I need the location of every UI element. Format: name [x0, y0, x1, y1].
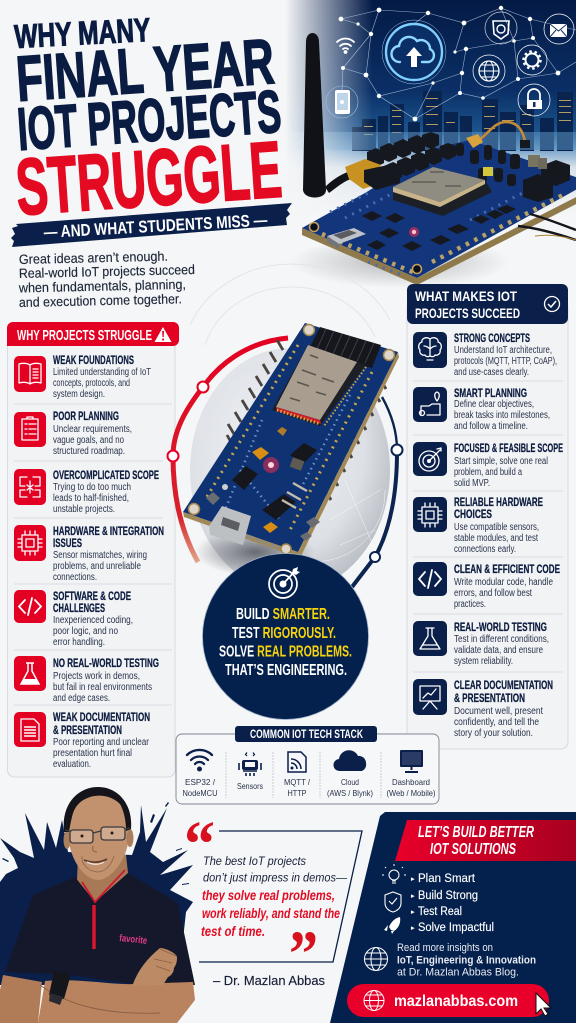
item: reliable hardware choices: CHOICES — [454, 508, 492, 521]
item: smart planning: Define clear objectives, — [454, 399, 534, 410]
item: no real-world testing: NO REAL-WORLD TESTING — [53, 657, 159, 670]
item: overcomplicated scope: unstable projects. — [53, 504, 115, 515]
item: weak foundations — [14, 354, 151, 400]
stack item: mqtt: HTTP — [288, 788, 307, 798]
item: reliable hardware choices: Use compatible sensors, — [454, 522, 539, 533]
item: overcomplicated scope — [14, 469, 159, 515]
item: weak documentation and presentation: Poor reporting and unclear — [53, 737, 150, 748]
quote block — [184, 808, 362, 991]
panel heading: what makes iot projects succeed — [407, 284, 568, 324]
chips — [232, 443, 317, 520]
item: poor planning — [14, 410, 132, 457]
gold pads — [277, 410, 320, 424]
intro paragraph: and execution come together. — [19, 291, 182, 310]
item: hardware and integration issues: problems, and unreliable — [53, 561, 141, 572]
quote block: The best IoT projects — [203, 854, 306, 868]
item: weak documentation and presentation: & PRESENTATION — [53, 724, 122, 737]
checklist: ▸ — [411, 876, 415, 883]
icon: mail — [544, 14, 574, 44]
intro paragraph: Great ideas aren’t enough. — [19, 249, 168, 267]
item: software and code challenges: poor logic, and no — [53, 626, 118, 637]
header pins — [227, 340, 386, 500]
item: overcomplicated scope: OVERCOMPLICATED SCOPE — [53, 469, 159, 482]
item: overcomplicated scope: leads to half-finished, — [53, 493, 129, 504]
led — [263, 457, 279, 473]
callout circle: build smarter — [202, 554, 368, 720]
icon: globe — [473, 55, 505, 87]
title — [13, 11, 285, 232]
callout circle: build smarter: TEST RIGOROUSLY. — [232, 625, 336, 642]
icon: shield badge — [485, 12, 517, 44]
navy paint splatter — [0, 802, 193, 985]
stack item: esp32: ESP32 / — [185, 777, 216, 787]
item: poor planning: vague goals, and no — [53, 435, 124, 446]
photo: Dr. Mazlan Abbas — [0, 787, 195, 1023]
checklist: Plan Smart — [418, 871, 476, 885]
intro paragraph: Real-world IoT projects succeed — [19, 262, 195, 281]
icon: lock — [518, 84, 550, 116]
item: strong concepts: Understand IoT architecture, — [454, 345, 552, 356]
item: clear documentation and presentation: story of your solution. — [454, 728, 533, 739]
item: strong concepts: and use-cases clearly. — [454, 367, 529, 378]
item: focused and feasible scope: Start simple, solve one real — [454, 456, 548, 467]
blog note — [397, 942, 536, 978]
item: no real-world testing: Projects work in demos, — [53, 671, 140, 682]
item: real-world testing — [413, 621, 549, 667]
item: real-world testing: Test in different conditions, — [454, 634, 549, 645]
checklist: ▸ — [411, 893, 415, 900]
mounting holes — [310, 222, 318, 232]
stack item: dashboard: Dashboard — [392, 777, 430, 787]
item: focused and feasible scope: solid MVP. — [454, 478, 490, 489]
item: software and code challenges: SOFTWARE & CODE — [53, 590, 131, 603]
item: no real-world testing: and edge cases. — [53, 693, 110, 704]
item: weak documentation and presentation: WEAK DOCUMENTATION — [53, 711, 150, 724]
stack item: cloud: Cloud — [341, 777, 359, 787]
edge pads — [322, 234, 415, 273]
item: smart planning: break tasks into milestones, — [454, 410, 550, 421]
shirt — [5, 873, 195, 985]
opening quote mark: “ — [184, 808, 215, 881]
title line: iot projects: IOT PROJECTS — [15, 78, 283, 163]
item: poor planning: Unclear requirements, — [53, 424, 132, 435]
wifi module — [393, 180, 492, 216]
item: poor planning: POOR PLANNING — [53, 410, 119, 423]
closing quote mark: ” — [289, 918, 318, 991]
title line: struggle: STRUGGLE — [13, 125, 285, 232]
illustration: ESP32 board — [183, 323, 399, 558]
checklist: Solve Impactful — [418, 920, 494, 934]
subtitle brush band — [11, 203, 292, 247]
stack item: sensors — [237, 752, 263, 791]
stack item: dashboard: (Web / Mobile) — [386, 788, 436, 798]
esp module — [272, 345, 366, 426]
panel heading: what makes iot projects succeed: PROJECTS SUCCEED — [415, 305, 520, 321]
item: clean and efficient code: errors, and follow best — [454, 588, 532, 599]
icon: shield — [385, 892, 401, 912]
face features — [84, 859, 107, 862]
item: hardware and integration issues: connections. — [53, 572, 97, 583]
item: clean and efficient code: Write modular code, handle — [454, 577, 553, 588]
collar trim — [82, 870, 125, 902]
heading pill — [235, 726, 377, 742]
item: weak foundations: WEAK FOUNDATIONS — [53, 354, 134, 367]
stack item: mqtt: MQTT / — [284, 777, 311, 787]
status led — [409, 227, 419, 237]
checklist: Build Strong — [418, 888, 478, 902]
glasses — [65, 827, 130, 843]
head — [68, 790, 129, 880]
item: software and code challenges: Inexperienced coding, — [53, 615, 133, 626]
quote block: don’t just impress in demos— — [203, 870, 348, 884]
hero: IoT network and city scene — [285, 0, 576, 215]
panel: let's build better iot solutions — [330, 812, 576, 1023]
center tech disc backdrop — [190, 264, 390, 592]
checklist: ▸ — [411, 909, 415, 916]
stack item: mqtt — [284, 752, 311, 798]
navy progress arc — [352, 397, 402, 587]
logo on shirt: favorite — [119, 933, 148, 947]
item: weak foundations: Limited understanding of IoT — [53, 367, 151, 378]
panel heading: why projects struggle: WHY PROJECTS STRUGGLE — [17, 327, 152, 344]
item: poor planning: structured roadmap. — [53, 446, 125, 457]
icon: blog globe — [364, 948, 388, 970]
intro paragraph: when fundamentals, planning, — [18, 277, 186, 296]
item: no real-world testing: but fail in real environments — [53, 682, 152, 693]
item: real-world testing: system reliability. — [454, 656, 513, 667]
item: no real-world testing — [14, 656, 159, 704]
item: hardware and integration issues: Sensor mismatches, wiring — [53, 550, 147, 561]
item: clear documentation and presentation — [413, 679, 553, 739]
item: clean and efficient code: practices. — [454, 599, 486, 610]
red progress arc — [168, 338, 288, 562]
item: hardware and integration issues: HARDWARE & INTEGRATION — [53, 525, 164, 538]
item: reliable hardware choices — [413, 496, 543, 555]
quote block: test of time. — [201, 924, 265, 939]
blog note: IoT, Engineering & Innovation — [397, 954, 536, 966]
item: hardware and integration issues — [14, 525, 164, 583]
item: weak documentation and presentation — [14, 711, 150, 770]
icon: light bulb — [382, 864, 406, 883]
stack item: esp32 — [182, 750, 218, 798]
holes — [304, 324, 314, 336]
icon: target — [269, 567, 300, 598]
item: software and code challenges — [14, 590, 133, 648]
illustration: large IoT development board — [290, 122, 576, 288]
heading pill: COMMON IOT TECH STACK — [250, 729, 364, 741]
item: hardware and integration issues: ISSUES — [53, 537, 82, 550]
usb connector — [209, 506, 251, 545]
item: clear documentation and presentation: confidently, and tell the — [454, 717, 539, 728]
item: clean and efficient code — [413, 562, 560, 610]
item: real-world testing: validate data, and ensure — [454, 645, 543, 656]
item: reliable hardware choices: connections early. — [454, 544, 516, 555]
checklist: Test Real — [418, 904, 462, 918]
neck — [77, 855, 128, 903]
icon: rocket — [384, 917, 400, 934]
panel: what makes iot projects succeed — [407, 284, 568, 749]
item: software and code challenges: error handling. — [53, 637, 105, 648]
title line: final year: FINAL YEAR — [14, 25, 276, 115]
item: overcomplicated scope: Trying to do too much — [53, 482, 131, 493]
panel: common iot tech stack — [176, 726, 439, 804]
crossed arms — [0, 975, 42, 1023]
components — [362, 132, 570, 251]
stack item: dashboard — [386, 750, 436, 798]
panel heading: why projects struggle — [7, 322, 179, 346]
callout circle: build smarter: SOLVE REAL PROBLEMS. — [219, 644, 352, 660]
item: focused and feasible scope — [413, 442, 563, 489]
website button — [347, 984, 551, 1017]
checklist — [411, 871, 494, 934]
red banner — [395, 820, 576, 861]
attribution: – Dr. Mazlan Abbas — [213, 973, 325, 988]
network lines and nodes — [339, 6, 576, 121]
smartwatch — [49, 971, 71, 1005]
rf header — [309, 327, 381, 368]
panel heading: what makes iot projects succeed: WHAT MAKES IOT — [415, 288, 517, 304]
cables — [518, 214, 576, 240]
quote block: they solve real problems, — [202, 888, 335, 903]
panel: why projects struggle — [7, 322, 179, 777]
item: reliable hardware choices: stable modules, and test — [454, 533, 538, 544]
blog note: Read more insights on — [397, 942, 493, 954]
item: smart planning — [413, 387, 550, 432]
item: strong concepts: STRONG CONCEPTS — [454, 332, 530, 345]
website button: mazlanabbas.com — [394, 993, 518, 1010]
item: strong concepts — [413, 332, 557, 378]
item: smart planning: SMART PLANNING — [454, 387, 527, 400]
item: weak documentation and presentation: presentation hurt final — [53, 748, 132, 759]
intro paragraph — [18, 249, 195, 310]
icon: wifi — [337, 38, 354, 53]
quote block: work reliably, and stand the — [202, 906, 340, 921]
icon: gear — [517, 45, 547, 75]
item: weak documentation and presentation: evaluation. — [53, 759, 91, 770]
callout circle: build smarter: BUILD SMARTER. — [236, 606, 330, 623]
subtitle brush band: — AND WHAT STUDENTS MISS — — [43, 211, 268, 242]
item: software and code challenges: CHALLENGES — [53, 602, 105, 615]
stack item: sensors: Sensors — [237, 781, 263, 791]
icon: glowing cloud upload — [382, 20, 446, 84]
stack item: esp32: NodeMCU — [182, 788, 218, 798]
blog note: at Dr. Mazlan Abbas Blog. — [397, 966, 519, 978]
item: focused and feasible scope: problem, and build a — [454, 467, 522, 478]
item: clear documentation and presentation: Document well, present — [454, 706, 543, 717]
usb port — [327, 228, 366, 244]
callout circle: build smarter: THAT’S ENGINEERING. — [225, 662, 347, 679]
icon: phone — [326, 86, 358, 118]
item: clear documentation and presentation: & PRESENTATION — [454, 692, 525, 705]
item: smart planning: and follow a timeline. — [454, 421, 528, 432]
stack item: cloud: (AWS / Blynk) — [327, 788, 373, 798]
board pads — [205, 345, 298, 500]
red banner: IOT SOLUTIONS — [430, 841, 516, 858]
title line: why many: WHY MANY — [13, 11, 151, 55]
item: weak foundations: system design. — [53, 389, 105, 400]
item: weak foundations: concepts, protocols, and — [53, 378, 130, 389]
stack item: cloud — [327, 750, 373, 798]
icon: antenna — [303, 33, 400, 198]
checklist: ▸ — [411, 925, 415, 932]
hair — [64, 787, 131, 832]
gold coax — [474, 122, 526, 146]
